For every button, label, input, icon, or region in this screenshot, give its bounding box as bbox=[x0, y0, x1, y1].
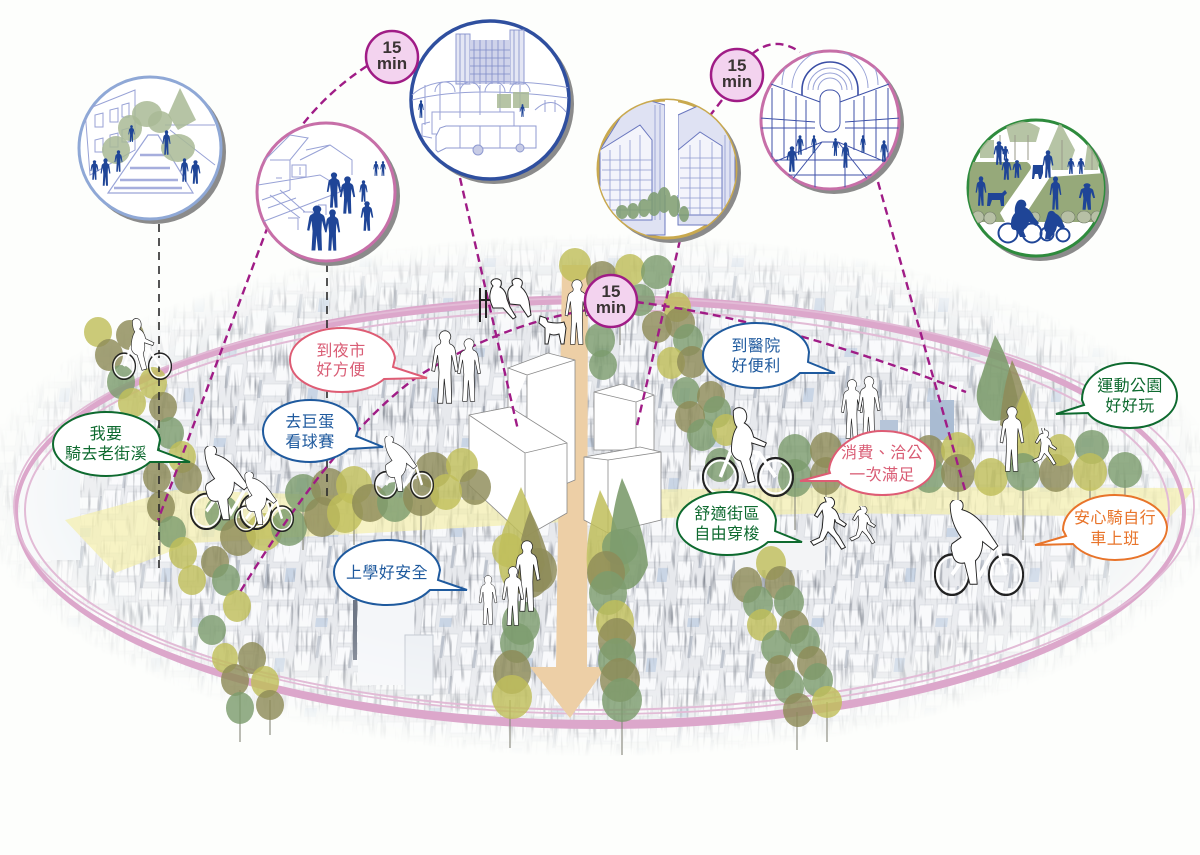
purple dashed walking routes bbox=[158, 44, 966, 592]
commuter cyclist bbox=[935, 499, 1023, 595]
speech bubble: baseball dome bbox=[263, 400, 383, 462]
black dashed connector: old street circle bbox=[158, 224, 160, 570]
city aerial background bbox=[0, 220, 1200, 760]
black dashed connector: night market circle bbox=[326, 264, 328, 500]
cone trees bbox=[499, 335, 1041, 598]
east band trees bbox=[778, 430, 1142, 497]
speech bubble: cycling to work: 車上班 bbox=[1090, 530, 1140, 548]
tree trunks bbox=[160, 300, 1125, 755]
speech bubble: sports park bbox=[1056, 363, 1177, 428]
speech bubble: comfortable blocks bbox=[677, 492, 802, 555]
runners bbox=[811, 490, 876, 549]
dog walker bbox=[539, 280, 589, 344]
speech bubble: old street creek: 我要 bbox=[90, 425, 122, 443]
speech bubble: sports park: 運動公園 bbox=[1097, 377, 1163, 395]
central white buildings bbox=[469, 353, 661, 537]
speech bubble: old street creek: 騎去老街溪 bbox=[65, 445, 147, 463]
speech bubble: shopping and business: 一次滿足 bbox=[849, 466, 915, 484]
speech bubble: hospital: 到醫院 bbox=[731, 337, 781, 355]
cyclist: north-west bbox=[113, 318, 171, 379]
badge: 15 min, centre bbox=[585, 275, 637, 327]
badge: 15 min, east: min bbox=[722, 72, 752, 91]
cyclists: parent and child bbox=[191, 445, 293, 531]
circle: office towers bbox=[598, 98, 741, 243]
circle: night market bbox=[257, 123, 400, 266]
circle: sports park bbox=[968, 120, 1109, 261]
speech bubble: shopping and business bbox=[800, 431, 935, 495]
badge: 15 min, west: min bbox=[377, 54, 407, 73]
yellow east-west corridor band bbox=[65, 487, 1195, 573]
family walking to school bbox=[479, 541, 540, 625]
adult and child in park bbox=[1000, 407, 1057, 471]
speech bubble: shopping and business: 消費、洽公 bbox=[841, 444, 923, 462]
badge: 15 min, centre: min bbox=[596, 298, 626, 317]
speech bubble: school bbox=[334, 540, 467, 605]
badge: 15 min, west bbox=[366, 31, 418, 83]
central tree columns bbox=[492, 529, 642, 722]
bench sitters bbox=[480, 278, 531, 322]
speech bubble: night market: 到夜市 bbox=[316, 342, 366, 360]
speech bubble: comfortable blocks: 自由穿梭 bbox=[694, 525, 760, 543]
badge: 15 min, centre: 15 bbox=[602, 282, 620, 301]
west band trees bbox=[205, 448, 491, 556]
speech bubble: school: 上學好安全 bbox=[346, 564, 428, 582]
pink 15 minute ring bbox=[14, 295, 1194, 729]
speech bubble: baseball dome: 去巨蛋 bbox=[285, 413, 335, 431]
speech bubble: old street creek bbox=[53, 412, 190, 476]
speech bubble: hospital bbox=[703, 323, 835, 388]
tree canopies bbox=[84, 248, 1142, 727]
badge: 15 min, east: 15 bbox=[728, 56, 746, 75]
circle: shopping arcade bbox=[760, 50, 904, 194]
badge: 15 min, east bbox=[711, 49, 763, 101]
speech bubble: night market: 好方便 bbox=[316, 361, 366, 379]
people silhouettes bbox=[113, 278, 1057, 625]
circle: bus terminal and tower bbox=[411, 21, 574, 184]
speech bubble: comfortable blocks: 舒適街區 bbox=[694, 505, 760, 523]
left tree column bbox=[84, 317, 284, 724]
cyclist: woman with basket bbox=[703, 408, 793, 496]
badge: 15 min, west: 15 bbox=[383, 38, 401, 57]
north tree cluster and east diagonal column bbox=[559, 248, 842, 727]
speech bubble: sports park: 好好玩 bbox=[1105, 397, 1155, 415]
speech bubble: hospital: 好便利 bbox=[731, 357, 781, 375]
speech bubble: cycling to work: 安心騎自行 bbox=[1074, 509, 1156, 527]
speech bubble: night market bbox=[290, 328, 427, 392]
elderly couple bbox=[841, 377, 880, 438]
couple at night market bbox=[432, 331, 481, 403]
speech bubble: baseball dome: 看球賽 bbox=[285, 432, 335, 451]
cyclist: west band bbox=[375, 436, 433, 498]
speech bubble: cycling to work bbox=[1035, 495, 1167, 560]
central road arrow bbox=[530, 265, 606, 718]
circle: tree-lined street crossing bbox=[79, 77, 226, 224]
